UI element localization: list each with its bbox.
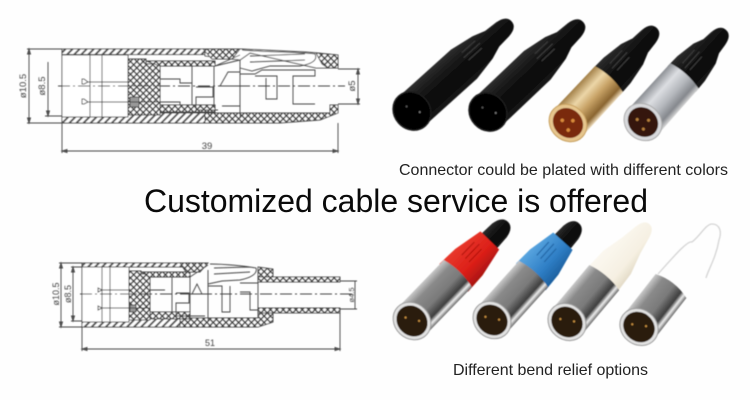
caption: bend relief: Different bend relief options (453, 362, 648, 379)
connector: black 2 (461, 7, 597, 139)
dimension labels: ø8.5 (37, 76, 48, 96)
dimension labels: ø8.5 (63, 285, 73, 303)
photo row: bend relief options (385, 208, 720, 353)
connector: white boot (540, 211, 665, 348)
centre lines (58, 85, 345, 87)
dimension labels: ø10.5 (18, 74, 29, 98)
connector body section (82, 263, 340, 327)
connector body section (62, 49, 338, 123)
connector: red boot (385, 208, 522, 347)
connector: silver plated (616, 16, 741, 148)
dimension lines (27, 49, 360, 153)
connector: white cord loop (612, 224, 720, 353)
dimension labels: ø10.5 (51, 282, 61, 306)
connector: gold plated (541, 14, 671, 149)
dimension lines (59, 263, 357, 351)
centre line (80, 293, 352, 295)
connector: black 1 (385, 6, 525, 138)
technical drawing: bottom connector, 51 long (51, 263, 357, 351)
title: Customized cable service is offered (144, 183, 648, 219)
photo row: plated connectors (385, 6, 741, 149)
caption: plating: Connector could be plated with different colors (399, 162, 728, 179)
dimension labels: 51 (205, 338, 215, 348)
dimension labels: ø4.5 (347, 287, 356, 303)
dimension labels: 39 (202, 141, 212, 152)
technical drawing: top connector, 39 long (18, 49, 360, 153)
dimension labels (18, 74, 358, 152)
connector: blue boot (465, 210, 594, 346)
dimension labels (51, 282, 356, 348)
dimension labels: ø5 (347, 80, 358, 92)
